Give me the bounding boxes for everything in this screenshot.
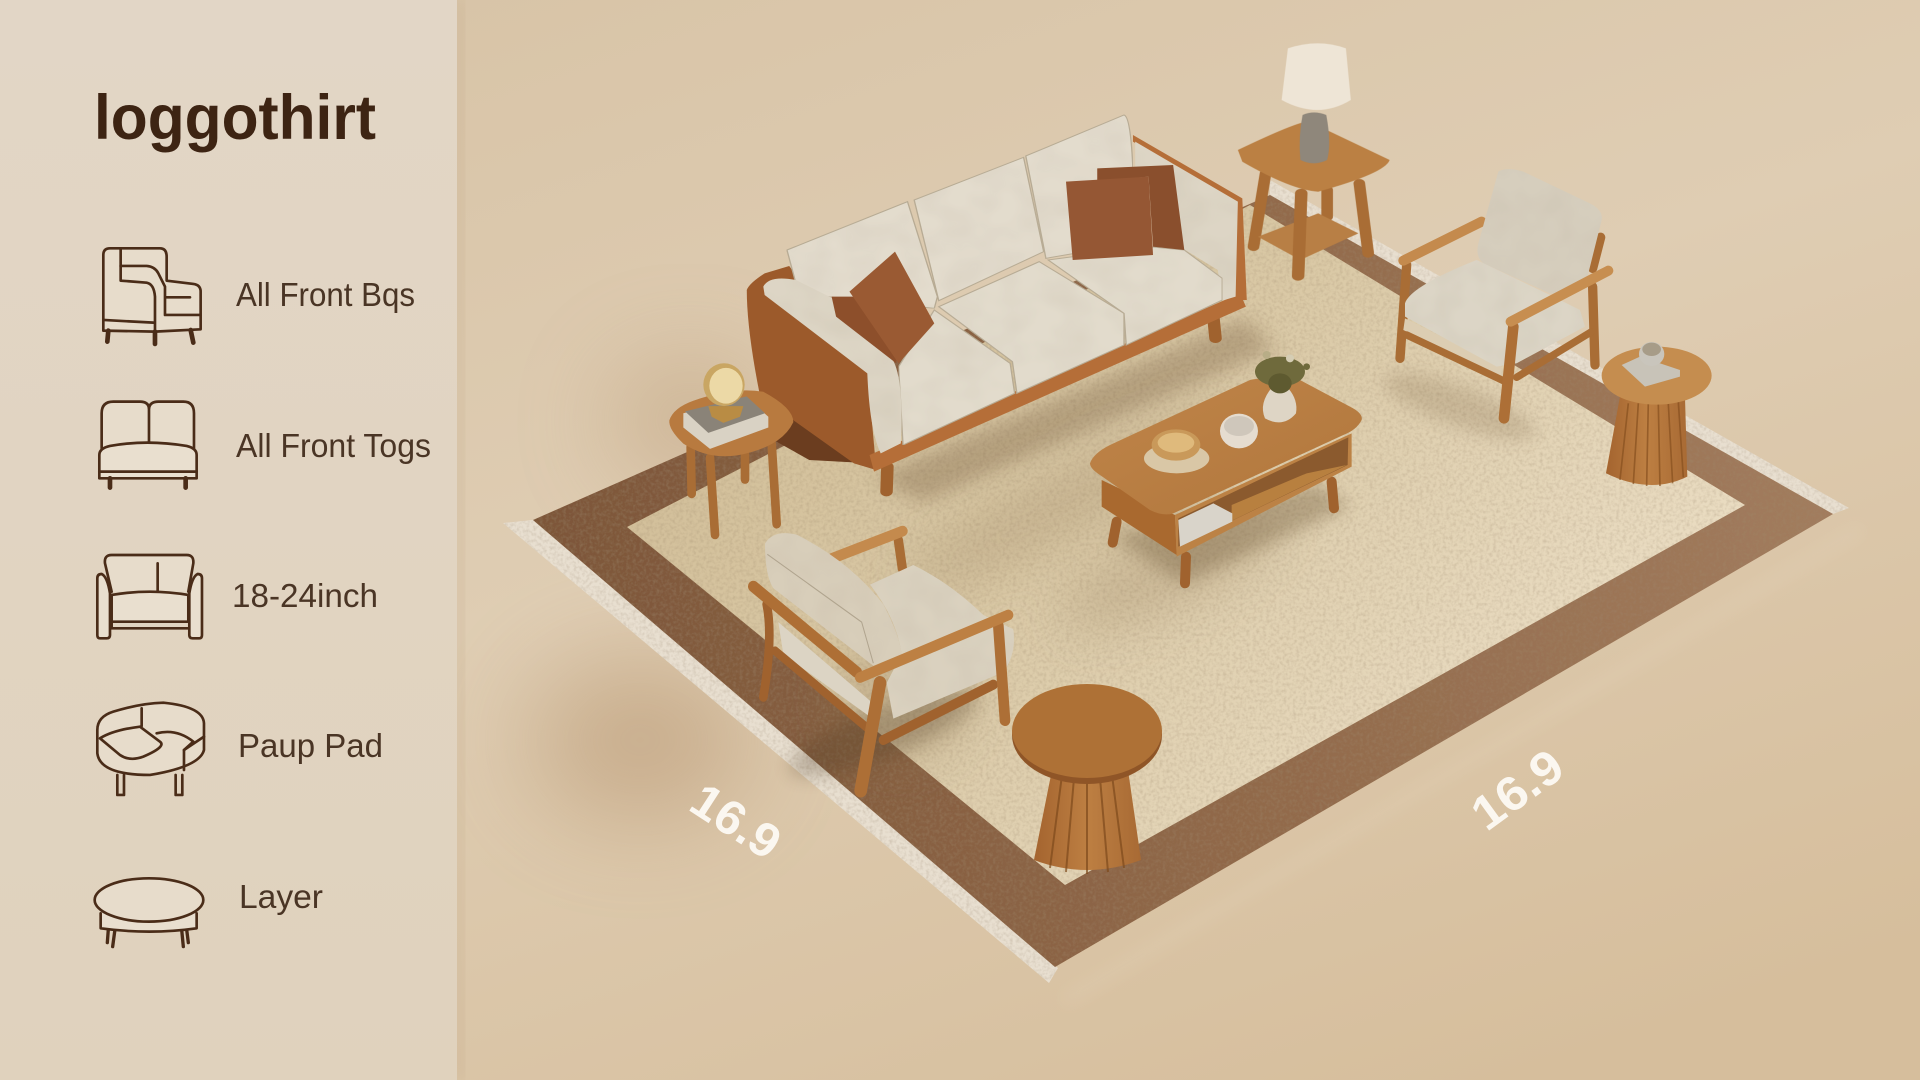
label: all front two: All Front Togs [236, 427, 431, 464]
side panel [1102, 480, 1177, 555]
sofa right rail [1133, 135, 1247, 300]
back cushion [765, 533, 902, 666]
lamp table [1238, 43, 1390, 276]
lower shelf surface [1178, 465, 1347, 547]
pedestal flutes [1620, 402, 1683, 486]
round side table front [1012, 684, 1162, 874]
back cushions [787, 115, 1133, 308]
table shadow [1110, 483, 1350, 583]
rug fringe [503, 180, 1849, 983]
lower rails [1407, 332, 1592, 381]
cream underside [778, 622, 870, 717]
label: all front one: All Front Bqs [236, 276, 415, 313]
seat band [1403, 318, 1502, 377]
pedestal [1606, 397, 1687, 485]
left pillows [832, 252, 934, 363]
sofa legs [887, 317, 1216, 492]
chair shadow [1378, 360, 1542, 453]
stacked books [683, 397, 768, 449]
shelf opening [1178, 437, 1348, 547]
icon: armchair front [97, 555, 202, 638]
label: paup pad: Paup Pad [238, 727, 383, 764]
chair shadow [781, 673, 985, 793]
ceramic bowl [1220, 414, 1258, 448]
icon: round table [95, 878, 203, 947]
icon: loveseat [99, 402, 197, 488]
label: layer: Layer [239, 878, 323, 915]
arm right [1511, 271, 1608, 322]
lower shelf [1258, 213, 1358, 260]
books [1622, 357, 1680, 387]
pedestal [1034, 770, 1141, 870]
seat cushion [870, 565, 1014, 719]
seat cushions [899, 247, 1222, 445]
table top [1090, 378, 1362, 514]
shelf books [1178, 503, 1232, 547]
rug shadows [830, 384, 1294, 760]
gold clock base [708, 406, 743, 423]
left back post [763, 604, 769, 697]
floor shadow left of rug [530, 660, 750, 820]
dimension left: 16.9 [681, 774, 790, 870]
posts [861, 626, 1005, 791]
top rail [753, 586, 857, 672]
lamp base [1300, 112, 1329, 163]
panel edge shadow [455, 0, 463, 1080]
sofa front rail [870, 293, 1246, 472]
gold clock [703, 363, 745, 406]
back posts [1400, 237, 1601, 365]
flowers [1255, 351, 1310, 393]
left panel [0, 0, 457, 1080]
pedestal flutes [1050, 775, 1124, 874]
cushion fold [767, 554, 873, 663]
sofa [747, 115, 1274, 503]
back arm [832, 531, 903, 569]
right arm [1135, 142, 1238, 301]
front arm [860, 615, 1008, 677]
front post [1504, 327, 1513, 418]
vase [1263, 387, 1296, 422]
rug right edge glow [1065, 530, 1860, 1000]
label: size range: 18-24inch [232, 577, 378, 614]
seat cushion [1405, 260, 1585, 367]
rug cream field [627, 205, 1745, 885]
armchair right [1378, 169, 1608, 453]
back cushion [1477, 169, 1602, 294]
table top [669, 390, 793, 456]
arm left [1403, 222, 1482, 261]
rug [503, 180, 1860, 1000]
side table left [669, 363, 793, 535]
lamp shade [1282, 43, 1351, 110]
round top [1602, 347, 1712, 405]
book top [685, 396, 765, 433]
table legs [691, 444, 777, 535]
side table right [1602, 342, 1712, 486]
right pillows [1066, 165, 1184, 260]
floor shadow behind sofa [610, 360, 770, 480]
rug brown border [533, 195, 1833, 967]
armchair left [753, 531, 1014, 793]
plate and bowl [1144, 429, 1209, 473]
icon: round sofa [97, 703, 204, 795]
dark under-sofa shadow [765, 397, 872, 463]
sofa left side panel [747, 266, 876, 470]
front leg [1298, 193, 1301, 276]
icon: armchair side [103, 248, 201, 344]
coffee table [1090, 351, 1362, 583]
dimension right: 16.9 [1462, 740, 1574, 841]
table legs [1253, 173, 1368, 253]
sofa shadow [876, 317, 1274, 503]
title: loggothirt [94, 83, 376, 153]
left arm [763, 278, 901, 453]
lower rails [775, 651, 993, 740]
round top [1012, 684, 1162, 784]
cup [1639, 342, 1664, 366]
shelf frame [1175, 433, 1352, 557]
table top [1238, 122, 1390, 192]
table legs [1113, 482, 1334, 583]
